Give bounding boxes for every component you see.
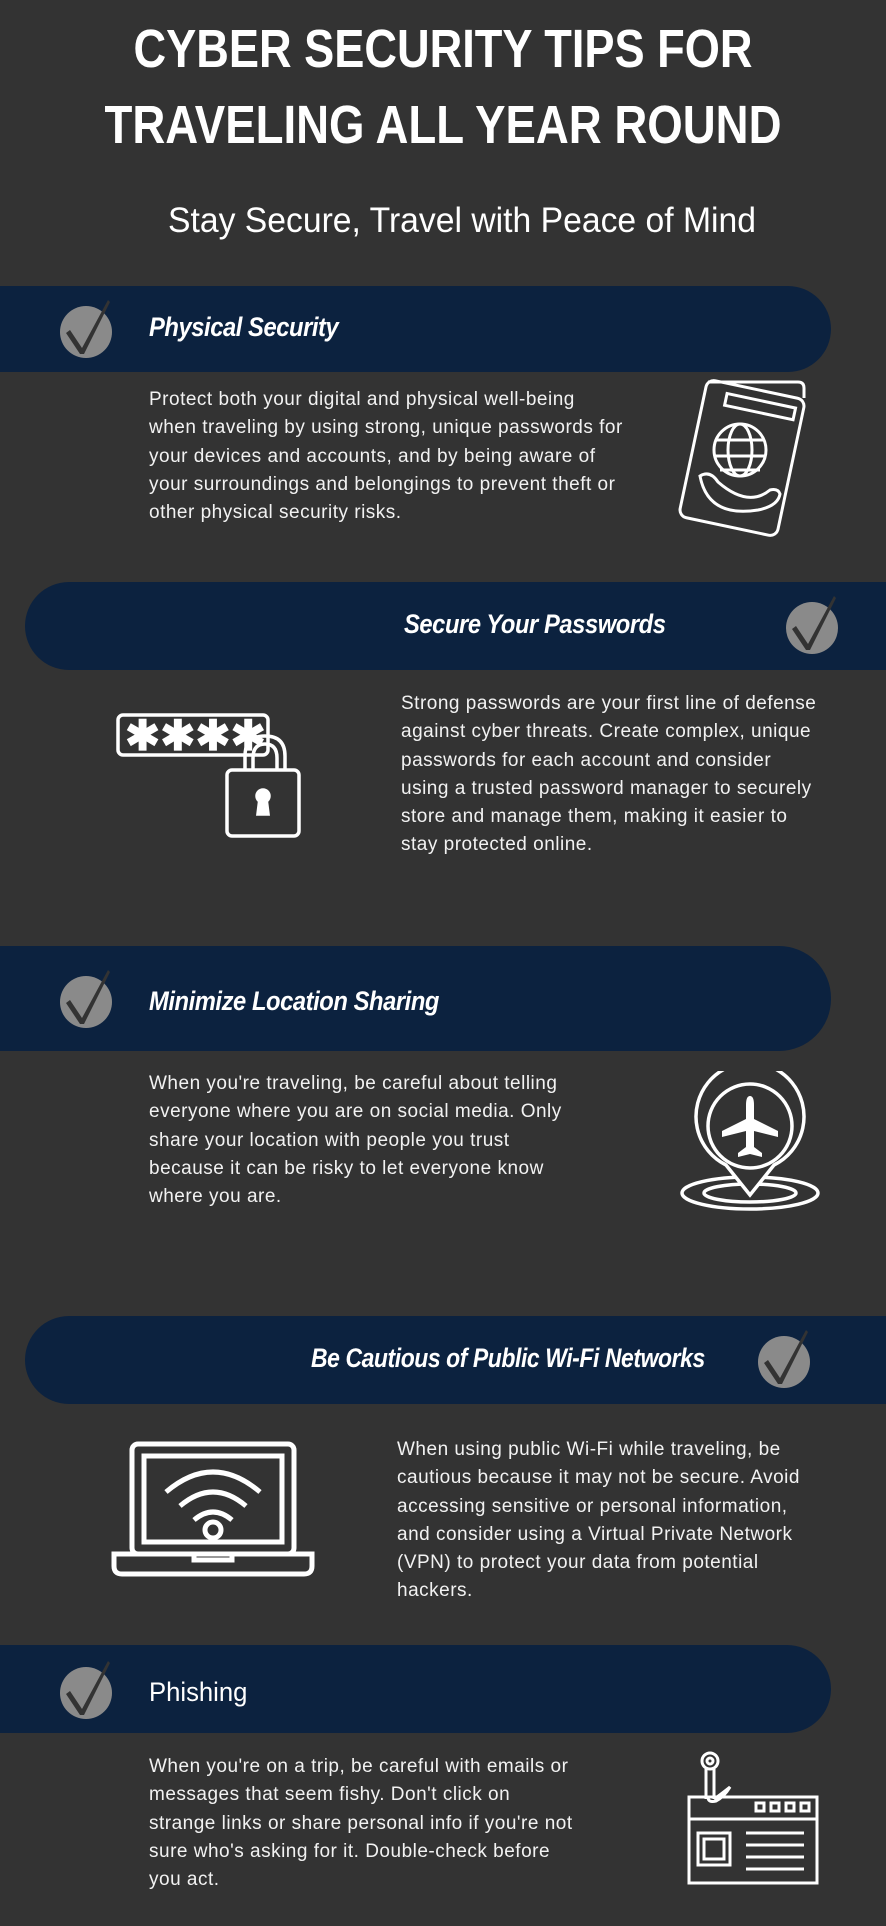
bar: location [0,946,831,1051]
bar: physical security [0,286,831,372]
heading: Secure Your Passwords [404,609,665,639]
text: because it can be risky to let everyone know [149,1158,544,1179]
text: accessing sensitive or personal information, [397,1496,788,1517]
icon: plane location pin [680,1071,820,1211]
icon: check [60,300,112,358]
text: sure who's asking for it. Double-check before [149,1841,550,1862]
icon: password lock: ✱✱✱✱ [125,712,266,759]
title: TRAVELING ALL YEAR ROUND [104,95,782,155]
text [149,1756,573,1890]
text: stay protected online. [401,834,593,855]
text: other physical security risks. [149,502,402,523]
text: When you're traveling, be careful about telling [149,1073,557,1094]
panel: minimize location sharing [0,946,831,1211]
text: Protect both your digital and physical well-being [149,389,575,410]
icon: password lock [116,712,301,838]
text: when traveling by using strong, unique passwords for [149,417,623,438]
bar: wifi [25,1316,886,1404]
text: store and manage them, making it easier to [401,806,787,827]
text: everyone where you are on social media. Only [149,1101,562,1122]
panel: public wi-fi [25,1316,886,1601]
text [397,1439,800,1601]
text: share your location with people you trust [149,1130,510,1151]
icon: check [60,970,112,1028]
text: Strong passwords are your first line of defense [401,693,816,714]
panel: phishing [0,1645,831,1890]
text: When you're on a trip, be careful with emails or [149,1756,568,1777]
text: (VPN) to protect your data from potential [397,1552,759,1573]
heading: Physical Security [149,312,338,342]
subtitle: Stay Secure, Travel with Peace of Mind [168,201,756,240]
text: When using public Wi-Fi while traveling, be [397,1439,781,1460]
icon: check [786,596,838,654]
text: you act. [149,1869,220,1890]
title [104,19,782,155]
text: strange links or share personal info if you're not [149,1813,573,1834]
panel: physical security [0,286,831,537]
heading: Minimize Location Sharing [149,986,439,1016]
text: where you are. [149,1186,282,1207]
text: using a trusted password manager to securely [401,778,812,799]
heading: Phishing [149,1677,247,1707]
text: and consider using a Virtual Private Network [397,1524,793,1545]
text: your surroundings and belongings to prevent theft or [149,474,615,495]
title: CYBER SECURITY TIPS FOR [134,19,752,79]
text: hackers. [397,1580,473,1601]
text [149,1073,562,1207]
text: cautious because it may not be secure. Avoid [397,1467,800,1488]
icon: passport [678,379,806,537]
icon: check [60,1661,112,1719]
heading: Be Cautious of Public Wi-Fi Networks [311,1343,705,1373]
panel: secure your passwords [25,582,886,855]
bar: passwords [25,582,886,670]
text: against cyber threats. Create complex, unique [401,721,811,742]
text [149,389,623,523]
bar: phishing [0,1645,831,1733]
icon: phishing browser [688,1752,818,1884]
text: passwords for each account and consider [401,750,771,771]
text: your devices and accounts, and by being aware of [149,446,596,467]
text [401,693,816,855]
icon: check [758,1330,810,1388]
icon: laptop wifi [112,1442,314,1576]
text: messages that seem fishy. Don't click on [149,1784,510,1805]
